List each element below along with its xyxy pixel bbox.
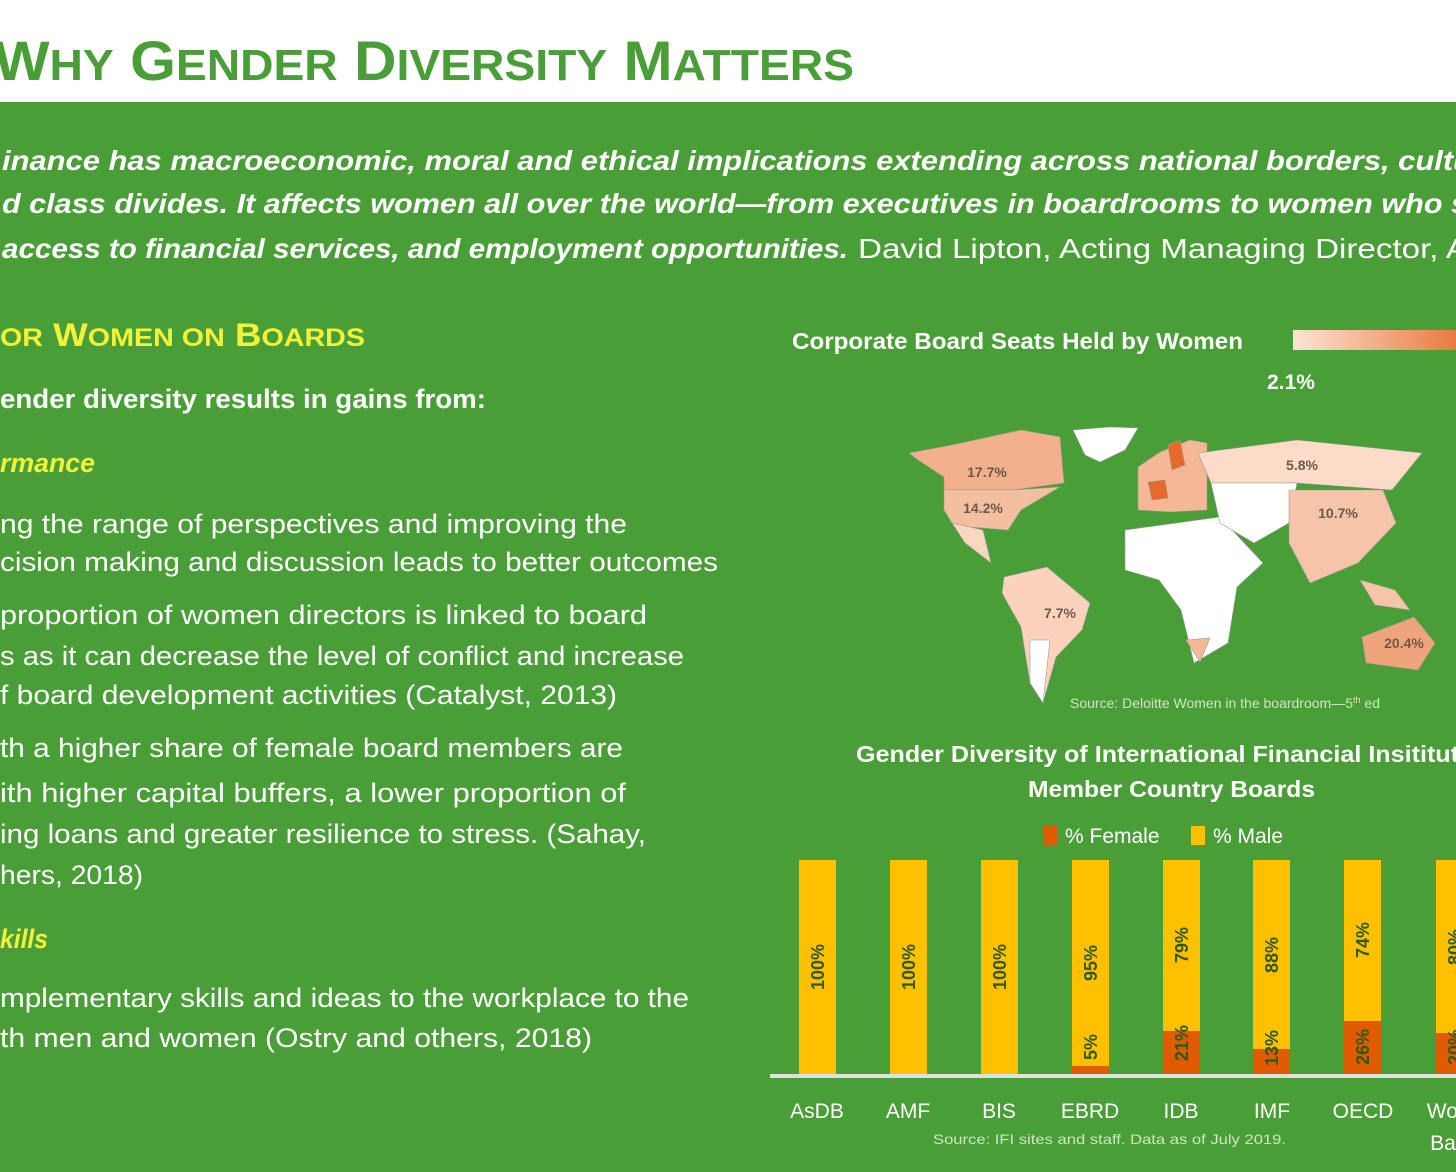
quote — [2, 145, 1456, 264]
chart legend — [1043, 825, 1283, 848]
quote: access to financial services, and employment opportunities. — [2, 233, 848, 264]
chart category labels: AMF — [886, 1100, 930, 1123]
quote: d class divides. It affects women all over the world—from executives in boardrooms to women who s — [2, 188, 1456, 219]
bar chart: 74% — [1353, 922, 1373, 958]
performance bullets: ng the range of perspectives and improving the — [0, 509, 627, 539]
map value labels: 14.2% — [963, 500, 1003, 516]
chart category labels: OECD — [1333, 1100, 1393, 1123]
map source: Source: Deloitte Women in the boardroom—5 — [1070, 695, 1353, 711]
bar chart: 26% — [1353, 1029, 1373, 1065]
map value labels: 5.8% — [1286, 457, 1319, 473]
skills bullet: mplementary skills and ideas to the workplace to the — [0, 983, 689, 1013]
skills bullet — [0, 983, 689, 1053]
chart source: Source: IFI sites and staff. Data as of July 2019. — [933, 1131, 1286, 1147]
intro line: ender diversity results in gains from: — [0, 384, 486, 414]
chart category labels: EBRD — [1061, 1100, 1119, 1123]
chart category labels: BIS — [982, 1100, 1016, 1123]
bar chart: 100% — [899, 944, 919, 990]
map title: Corporate Board Seats Held by Women — [792, 328, 1243, 354]
subheading: performance: rmance — [0, 448, 95, 478]
map legend gradient: 2.1% — [1267, 371, 1315, 394]
performance bullets: f board development activities (Catalyst, 2013) — [0, 680, 617, 710]
performance bullets: th a higher share of female board members are — [0, 733, 623, 763]
chart category labels: IDB — [1163, 1100, 1199, 1123]
bar chart: 21% — [1172, 1025, 1192, 1061]
performance bullets: ing loans and greater resilience to stress. (Sahay, — [0, 819, 646, 849]
bar chart: 79% — [1172, 927, 1192, 963]
bar chart: 88% — [1262, 937, 1282, 973]
performance bullets: hers, 2018) — [0, 860, 143, 890]
map value labels: 17.7% — [967, 464, 1007, 480]
chart legend: % Female — [1065, 825, 1160, 848]
bar chart — [770, 860, 1456, 1078]
map source: th — [1353, 695, 1361, 705]
section heading: women on boards: OR WOMEN ON BOARDS — [0, 317, 365, 353]
performance bullets: ith higher capital buffers, a lower proportion of — [0, 778, 627, 808]
chart category labels: AsDB — [790, 1100, 844, 1123]
map legend gradient — [1267, 330, 1456, 394]
title: WHY GENDER DIVERSITY MATTERS — [0, 29, 854, 92]
subheading: skills: kills — [0, 924, 48, 954]
map value labels: 10.7% — [1318, 505, 1358, 521]
map source: ed — [1361, 695, 1380, 711]
chart title — [856, 741, 1456, 802]
quote: David Lipton, Acting Managing Director, A — [858, 233, 1456, 264]
world map — [909, 427, 1435, 703]
map value labels: 7.7% — [1044, 605, 1077, 621]
performance bullets — [0, 509, 718, 890]
map value labels: 20.4% — [1384, 635, 1424, 651]
chart title: Member Country Boards — [1028, 776, 1315, 802]
quote: inance has macroeconomic, moral and ethical implications extending across national borders, cultu — [2, 145, 1456, 176]
performance bullets: proportion of women directors is linked to board — [0, 600, 647, 630]
chart title: Gender Diversity of International Financial Insitituti — [856, 741, 1456, 767]
map value labels — [963, 457, 1424, 651]
bar chart: 100% — [808, 944, 828, 990]
bar chart: 95% — [1081, 945, 1101, 981]
chart category labels — [790, 1100, 1456, 1155]
bar chart: 100% — [990, 944, 1010, 990]
bar chart: 13% — [1262, 1030, 1282, 1066]
chart legend: % Male — [1213, 825, 1283, 848]
performance bullets: cision making and discussion leads to better outcomes — [0, 547, 718, 577]
performance bullets: s as it can decrease the level of conflict and increase — [0, 641, 684, 671]
skills bullet: th men and women (Ostry and others, 2018) — [0, 1023, 592, 1053]
chart category labels: IMF — [1254, 1100, 1290, 1123]
bar chart: 5% — [1081, 1034, 1101, 1060]
